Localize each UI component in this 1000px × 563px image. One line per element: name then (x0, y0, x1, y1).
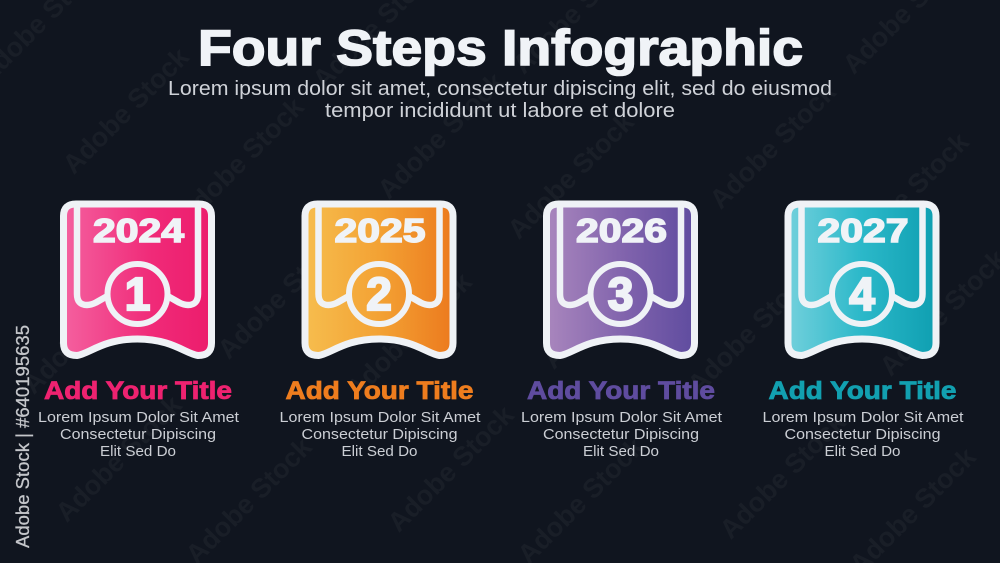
heading: step 3 title: Add Your Title (527, 377, 715, 405)
icon: 2027 badge (788, 204, 936, 356)
watermark pattern: Adobe Stock (837, 126, 975, 265)
watermark pattern: Adobe Stock (17, 261, 155, 400)
stock id label: Adobe Stock | #640195635 (13, 325, 33, 548)
text: step 4 description: Consectetur Dipiscing (784, 427, 940, 443)
watermark pattern: Adobe Stock (502, 106, 640, 245)
text: step 3 description: Consectetur Dipiscing (543, 427, 699, 443)
watermark pattern: Adobe Stock (704, 76, 842, 215)
watermark pattern: Adobe Stock (714, 406, 852, 545)
watermark pattern: Adobe Stock (682, 261, 820, 400)
text: step 2 description: Consectetur Dipiscing (302, 427, 458, 443)
text: step 3 description: Elit Sed Do (583, 444, 659, 460)
icon: 2025 badge: 2025 (334, 212, 426, 249)
text: step 1 description: Elit Sed Do (100, 444, 176, 460)
text: step 4 description (762, 410, 964, 460)
subtitle: Lorem ipsum dolor sit amet, consectetur dipiscing elit, sed do eiusmod (168, 78, 832, 100)
heading: step 1 title: Add Your Title (44, 377, 232, 405)
icon: 2027 badge: 4 (849, 268, 875, 320)
text: step 1 description (38, 410, 239, 460)
text: step 3 description (521, 410, 722, 460)
icon: 2027 badge: 2027 (818, 212, 908, 249)
text: step 2 description: Elit Sed Do (342, 444, 418, 460)
icon: 2026 badge: 2026 (576, 212, 667, 249)
step 1 (38, 204, 239, 460)
icon: 2026 badge: 3 (608, 268, 633, 320)
watermark pattern: Adobe Stock (372, 66, 510, 205)
text: step 4 description: Elit Sed Do (824, 444, 900, 460)
icon: 2026 badge (546, 204, 694, 356)
heading: step 2 title: Add Your Title (286, 377, 474, 405)
heading: step 4 title: Add Your Title (768, 377, 957, 405)
icon: 2024 badge (64, 204, 212, 356)
watermark pattern: Adobe Stock (212, 226, 350, 365)
step 3 (521, 204, 722, 460)
subtitle (168, 78, 832, 122)
step 4 (762, 204, 964, 460)
watermark pattern: Adobe Stock (172, 91, 310, 230)
text: step 3 description: Lorem Ipsum Dolor Sit Amet (521, 410, 722, 426)
icon: 2024 badge: 2024 (93, 212, 185, 249)
text: step 2 description: Lorem Ipsum Dolor Sit Amet (280, 410, 480, 426)
watermark pattern: Adobe Stock (340, 266, 478, 405)
text: step 1 description: Lorem Ipsum Dolor Sit Amet (38, 410, 239, 426)
icon: 2025 badge (305, 204, 453, 356)
icon: 2024 badge: 1 (125, 268, 150, 320)
watermark pattern: Adobe Stock (537, 236, 675, 375)
watermark pattern: Adobe Stock (57, 41, 195, 180)
subtitle: tempor incididunt ut labore et dolore (325, 100, 675, 122)
step 2 (280, 204, 480, 460)
icon: 2025 badge: 2 (366, 268, 392, 320)
title: Four Steps Infographic (198, 20, 803, 76)
watermark pattern: Adobe Stock (382, 399, 520, 538)
text: step 1 description: Consectetur Dipiscing (60, 427, 216, 443)
watermark pattern: Adobe Stock (50, 389, 188, 528)
text: step 4 description: Lorem Ipsum Dolor Sit Amet (762, 410, 964, 426)
text: step 2 description (280, 410, 480, 460)
